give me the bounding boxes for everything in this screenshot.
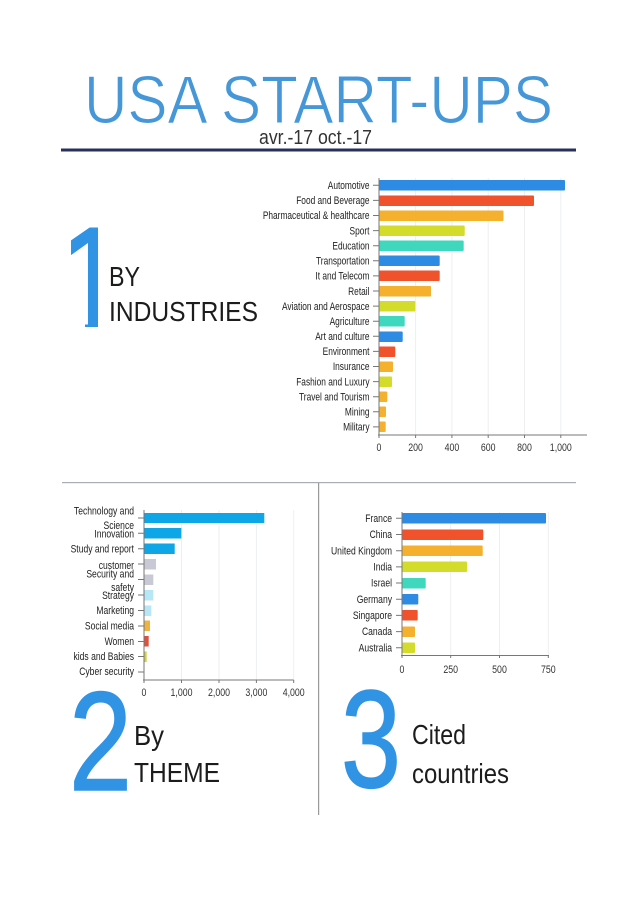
heading text: by theme: [134, 720, 220, 788]
industry axis values: 200: [408, 442, 423, 454]
country axis values: 250: [443, 664, 458, 676]
theme bars: [144, 513, 264, 662]
country labels: Canada: [362, 626, 392, 638]
number 2: 2: [69, 662, 132, 820]
theme labels: Strategy: [102, 590, 134, 602]
industry labels: Art and culture: [315, 331, 370, 343]
theme labels: Study and report: [71, 544, 134, 556]
industry labels: Automotive: [328, 180, 370, 192]
theme axis values: [142, 687, 305, 699]
theme labels: Science: [103, 520, 134, 532]
industry labels: Agriculture: [330, 316, 370, 328]
theme labels: Marketing: [96, 605, 134, 617]
heading text: cited countries: Cited: [412, 719, 466, 750]
country bars: [402, 513, 546, 653]
theme labels: Technology and: [74, 506, 134, 518]
heading text: cited countries: countries: [412, 758, 509, 789]
industry labels: Education: [332, 240, 370, 253]
heading text: by theme: By: [134, 720, 164, 751]
industry labels: Retail: [348, 286, 370, 298]
theme labels: Security and: [86, 569, 134, 581]
theme labels: safety: [111, 582, 134, 594]
panel: by industries heading: [71, 228, 257, 327]
industry labels: Fashion and Luxury: [296, 376, 370, 389]
theme labels: Social media: [85, 621, 134, 633]
section divider vertical: [318, 483, 319, 815]
industry axis values: 0: [377, 442, 382, 454]
theme axes: [138, 510, 294, 683]
panel: by theme heading: [69, 662, 220, 820]
heading text: by theme: THEME: [134, 757, 220, 788]
industry labels: Aviation and Aerospace: [282, 301, 370, 313]
country axis values: [400, 664, 556, 676]
industry axis values: 600: [481, 442, 496, 454]
industry labels: Mining: [345, 406, 370, 419]
theme labels: Women: [105, 636, 134, 648]
country axis values: 0: [400, 664, 405, 676]
industry labels: Sport: [350, 225, 370, 238]
industry labels: Food and Beverage: [296, 195, 370, 207]
date range subtitle: avr.-17 oct.-17: [259, 127, 372, 149]
country labels: Germany: [357, 594, 392, 606]
theme labels: Cyber security: [79, 666, 134, 678]
industry labels: Transportation: [316, 255, 370, 268]
theme axis values: 2,000: [208, 687, 230, 699]
country labels: [331, 513, 392, 655]
industry bars: [379, 180, 565, 432]
theme labels: kids and Babies: [73, 651, 134, 663]
country labels: China: [370, 529, 392, 541]
industry axis values: 1,000: [550, 442, 572, 454]
heading text: cited countries: [412, 719, 509, 789]
theme labels: [71, 506, 135, 678]
theme axis values: 3,000: [245, 687, 268, 699]
industry labels: Insurance: [333, 361, 370, 373]
industry labels: It and Telecom: [315, 270, 370, 283]
theme labels: Innovation: [94, 529, 134, 541]
heading text: by industries: [109, 261, 258, 327]
number 3: 3: [341, 662, 401, 817]
country labels: Australia: [359, 643, 392, 655]
country labels: Israel: [371, 578, 392, 590]
country axis values: 750: [541, 664, 556, 676]
theme labels: customer: [99, 560, 135, 572]
industry axis values: 800: [517, 442, 532, 454]
country labels: Singapore: [353, 610, 392, 622]
title: USA START-UPS: [84, 62, 553, 138]
country axes: [396, 512, 549, 658]
industry labels: [263, 180, 370, 434]
bar chart: industries: [263, 178, 587, 454]
bar chart: countries: [331, 512, 556, 676]
theme axis values: 1,000: [170, 687, 193, 699]
industry labels: Environment: [323, 346, 370, 358]
industry axes: [373, 178, 587, 438]
heading text: by industries: BY: [109, 261, 140, 292]
country labels: India: [373, 562, 392, 574]
country axis values: 500: [492, 664, 507, 676]
industry labels: Travel and Tourism: [299, 391, 370, 404]
industry labels: Military: [343, 421, 370, 434]
industry axis values: 400: [445, 442, 460, 454]
country labels: France: [365, 513, 392, 525]
heading text: by industries: INDUSTRIES: [109, 296, 258, 327]
theme axis values: 0: [142, 687, 147, 699]
number 1: 1: [49, 195, 137, 371]
bar chart: themes: [71, 506, 305, 699]
country labels: United Kingdom: [331, 546, 392, 558]
industry labels: Pharmaceutical & healthcare: [263, 210, 370, 222]
theme axis values: 4,000: [283, 687, 305, 699]
section divider horizontal: [62, 482, 576, 483]
title rule: [61, 148, 576, 152]
industry axis values: [377, 442, 572, 454]
panel: cited countries heading: [341, 662, 509, 817]
